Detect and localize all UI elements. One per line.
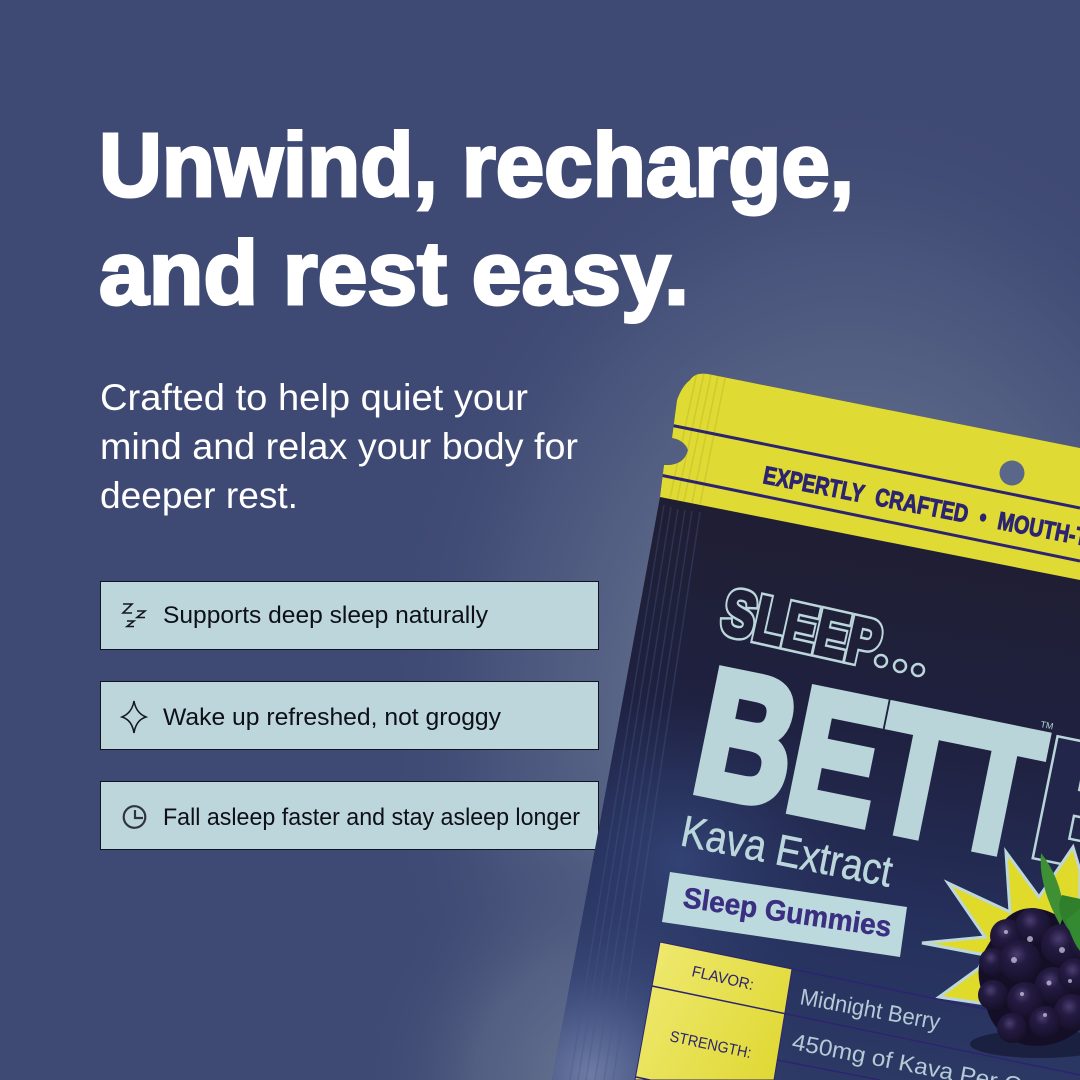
pouch seam crimps — [570, 505, 700, 1080]
Kava Extract: Kava Extract — [677, 807, 896, 897]
band rule lines — [660, 425, 1080, 561]
SLEEP outlined wordmark — [720, 587, 884, 666]
table yellow column — [635, 942, 792, 1080]
table values — [792, 988, 1020, 1080]
SLEEP outlined wordmark: SLEEP — [716, 575, 888, 680]
Sleep Gummies label: Sleep Gummies — [681, 882, 893, 944]
table labels: FLAVOR: — [690, 963, 755, 994]
pouch body — [540, 360, 1080, 1080]
table labels: STRENGTH: — [668, 1028, 753, 1062]
product pouch — [540, 360, 1080, 1080]
subheading text: deeper rest. — [100, 475, 298, 516]
icon: blackberry — [978, 908, 1080, 1046]
Sleep Gummies label — [662, 872, 907, 957]
berry shadow — [970, 1030, 1080, 1058]
benefit text: wake refreshed: Wake up refreshed, not groggy — [163, 704, 502, 731]
subheading text — [100, 377, 578, 516]
benefit text: fall asleep: Fall asleep faster and stay asleep longer — [163, 804, 580, 831]
outlined E — [1031, 734, 1080, 865]
subheading text: mind and relax your body for — [100, 426, 578, 467]
yellow band crimps — [670, 372, 725, 505]
icon: sparkle — [122, 701, 146, 733]
benefit text: deep sleep: Supports deep sleep naturally — [163, 602, 489, 629]
trademark: TM — [1040, 719, 1054, 731]
icon: zzz — [123, 604, 145, 626]
benefit: fall asleep — [100, 782, 598, 850]
SLEEP outlined wordmark: SLEEP — [716, 575, 888, 680]
table values: Midnight Berry — [798, 983, 943, 1035]
benefit: wake refreshed — [100, 682, 598, 750]
title: Unwind, recharge, — [99, 116, 854, 216]
starburst — [922, 847, 1080, 1010]
subheading text: Crafted to help quiet your — [100, 377, 528, 418]
table labels — [670, 966, 753, 1058]
ellipsis dots — [875, 655, 924, 676]
yellow top band — [650, 360, 1080, 580]
hang hole — [1000, 460, 1024, 486]
icon: clock — [124, 806, 145, 828]
table lines — [636, 969, 1080, 1080]
info table — [635, 942, 1080, 1080]
benefit: deep sleep — [100, 582, 598, 650]
title: and rest easy. — [99, 224, 689, 324]
icon: berry leaves — [1041, 853, 1080, 955]
title — [99, 116, 854, 324]
